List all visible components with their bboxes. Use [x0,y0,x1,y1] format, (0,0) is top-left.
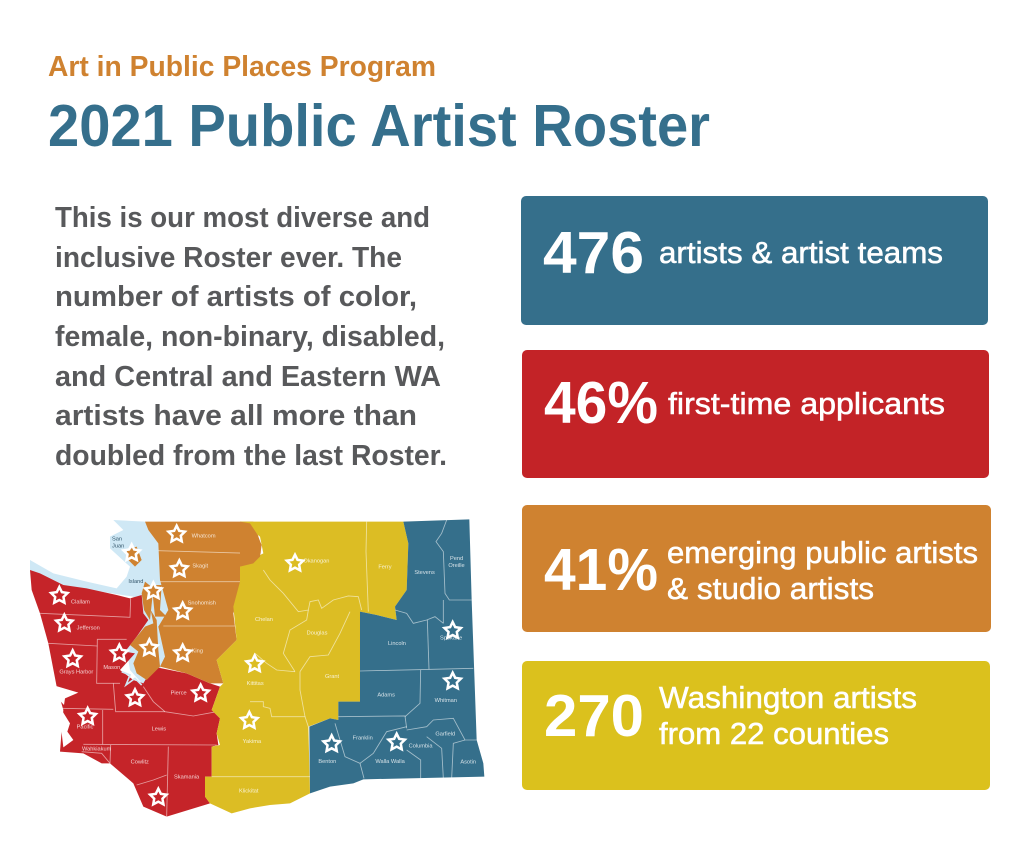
county labels: Spokane [440,636,462,642]
stat panel: artists and teams: 476 [543,220,644,286]
stat panel: artists and teams [521,196,988,325]
water: Puget Sound and straits [30,520,177,685]
region: yellow central counties [205,522,408,813]
region: orange Puget Sound counties [145,522,261,683]
county labels: Lewis [152,727,166,733]
intro paragraph: and Central and Eastern WA [55,361,441,393]
county labels: Snohomish [188,601,216,607]
stat panel: first-time applicants: 46% [544,370,658,436]
county labels: Franklin [353,736,373,742]
stat panel: emerging artists [522,505,991,632]
subtitle: Art in Public Places Program [48,51,436,83]
county labels: Island [128,579,143,585]
intro paragraph: inclusive Roster ever. The [55,242,402,274]
county labels: Jefferson [77,625,100,631]
stat panel: emerging artists: & studio artists [667,571,874,606]
county labels: Walla Walla [375,759,406,765]
intro paragraph [55,202,447,472]
county labels: Kittitas [247,681,264,687]
county labels: Juan [112,543,124,549]
stat panel: emerging artists: 41% [544,537,658,603]
county labels: Skagit [192,563,208,569]
county labels: Asotin [460,759,476,765]
stat panel: first-time applicants [522,350,989,478]
intro paragraph: number of artists of color, [55,281,417,313]
county labels: Whitman [435,698,457,704]
county labels: Okanogan [303,558,329,564]
map: western half [30,520,261,817]
stat panel: Washington artists [522,661,990,790]
region: orange islands [142,582,153,620]
region: orange Kitsap peninsula [130,610,160,680]
county labels: Ferry [378,565,392,571]
county labels: Columbia [409,744,433,750]
county labels: Pierce [171,690,187,696]
intro paragraph: artists have all more than [55,400,417,432]
county labels: Yakima [243,739,262,745]
county labels: Chelan [255,617,273,623]
region: orange overlap at northern border [240,522,262,567]
map of Washington counties [30,519,484,817]
stat panel: Washington artists: from 22 counties [659,716,889,751]
region: red western counties [30,570,220,817]
county labels [239,556,476,795]
county labels: Stevens [414,570,435,576]
intro paragraph: doubled from the last Roster. [55,440,447,472]
county labels: Cowlitz [131,759,149,765]
county labels: Pend [450,556,463,562]
region: bays on the Pacific coast [56,686,78,705]
county labels: Grant [325,674,340,680]
county labels: Grays Harbor [59,669,93,675]
county labels: San [112,537,122,543]
stat panel: Washington artists: 270 [544,683,644,749]
intro paragraph: female, non-binary, disabled, [55,321,445,353]
county labels: Wahkiakum [82,747,112,753]
county labels [59,534,216,781]
title: 2021 Public Artist Roster [48,93,710,159]
county labels: Clallam [71,600,90,606]
stat panel: emerging artists: emerging public artists [667,535,978,570]
county labels: Klickitat [239,789,259,795]
county labels: Garfield [435,731,455,737]
stat panel: Washington artists: Washington artists [659,680,917,715]
stat panel: first-time applicants: first-time applicants [668,386,945,421]
star markers [241,555,461,751]
county labels: Skamania [174,775,200,781]
county labels: Lincoln [388,641,406,647]
county labels: King [192,649,203,655]
county labels: Oreille [448,563,465,569]
intro paragraph: This is our most diverse and [55,202,430,234]
county lines [212,520,477,778]
region: white Hood Canal inlets [122,672,142,685]
map: eastern half [205,519,484,813]
star markers [51,526,209,804]
region: blue eastern counties [309,519,484,793]
county labels: Douglas [307,631,328,637]
stat panel: artists and teams: artists & artist teams [659,235,943,270]
county labels: Adams [377,692,395,698]
county labels: Whatcom [192,534,216,540]
county lines [40,551,250,817]
county labels: Benton [318,759,336,765]
county labels: Pacific [77,724,93,730]
county labels: Mason [103,665,120,671]
